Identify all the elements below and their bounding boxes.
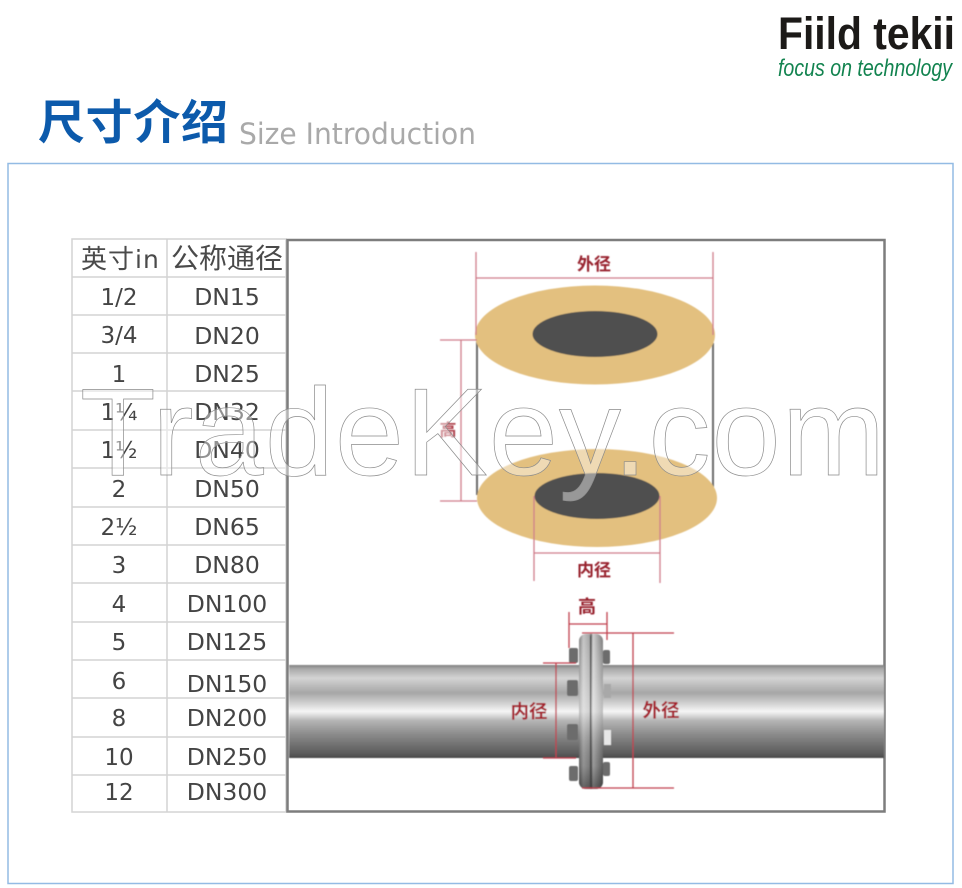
table column: nominal diameter: DN65: [194, 513, 260, 541]
pipe: [289, 665, 884, 758]
diagram: pipe with flange: [289, 596, 884, 789]
flange: [579, 634, 603, 789]
table column: nominal diameter: DN20: [194, 322, 260, 350]
heading: Chinese title: 尺寸介绍: [38, 96, 228, 149]
table column: inches: 1/2: [100, 285, 138, 311]
table column: inches: 4: [112, 592, 126, 618]
table column: nominal diameter: DN50: [194, 475, 260, 503]
table column: inches: 6: [112, 669, 126, 695]
table header: [81, 243, 283, 274]
table column: inches: 2½: [101, 515, 137, 541]
watermark: TradeKey.com: TradeKey.com: [80, 364, 885, 502]
table column: nominal diameter: DN40: [194, 436, 260, 464]
top ring: [475, 286, 715, 384]
table column: nominal diameter: DN250: [187, 743, 267, 771]
table column: nominal diameter: DN200: [187, 704, 267, 732]
label: height: 高: [578, 596, 596, 617]
panel: diagram frame: [288, 240, 884, 812]
table header: 公称通径: [171, 243, 283, 274]
cylinder side lines: [477, 340, 713, 495]
table column: nominal diameter: DN100: [187, 590, 267, 618]
dimension lines: [440, 252, 713, 583]
table column: inches: 5: [112, 630, 126, 656]
bolts: [567, 648, 611, 781]
table column: inches: 8: [112, 706, 126, 732]
table column: nominal diameter: DN150: [187, 670, 267, 698]
table column: inches: [100, 285, 138, 806]
table column: nominal diameter: DN32: [194, 398, 260, 426]
table column: inches: 1½: [101, 438, 137, 464]
label: outer diameter: 外径: [642, 700, 680, 721]
label: outer diameter: 外径: [577, 255, 611, 274]
logo: Fiild tekii: [778, 8, 955, 82]
table column: inches: 3/4: [100, 323, 138, 349]
table column: nominal diameter: DN125: [187, 628, 267, 656]
table column: inches: 1¼: [101, 400, 137, 426]
bottom ring: [477, 449, 717, 547]
table column: nominal diameter: [187, 283, 267, 806]
table column: nominal diameter: DN300: [187, 778, 267, 806]
label: height: 高: [440, 420, 456, 440]
table column: inches: 2: [112, 477, 126, 503]
table column: nominal diameter: DN80: [194, 551, 260, 579]
table column: nominal diameter: DN25: [194, 360, 260, 388]
table column: nominal diameter: DN15: [194, 283, 260, 311]
label: inner diameter: 内径: [510, 701, 548, 722]
table header: 英寸in: [81, 244, 160, 274]
table column: inches: 12: [104, 780, 134, 806]
table column: inches: 1: [112, 362, 126, 388]
panel: blue frame: [8, 164, 953, 884]
table column: inches: 3: [112, 553, 126, 579]
dimension lines: [543, 612, 674, 788]
diagram: ring dimensions: [440, 252, 717, 583]
table: size chart: [72, 239, 286, 812]
heading: English subtitle: Size Introduction: [239, 117, 476, 151]
label: inner diameter: 内径: [577, 561, 611, 580]
table column: inches: 10: [104, 745, 134, 771]
